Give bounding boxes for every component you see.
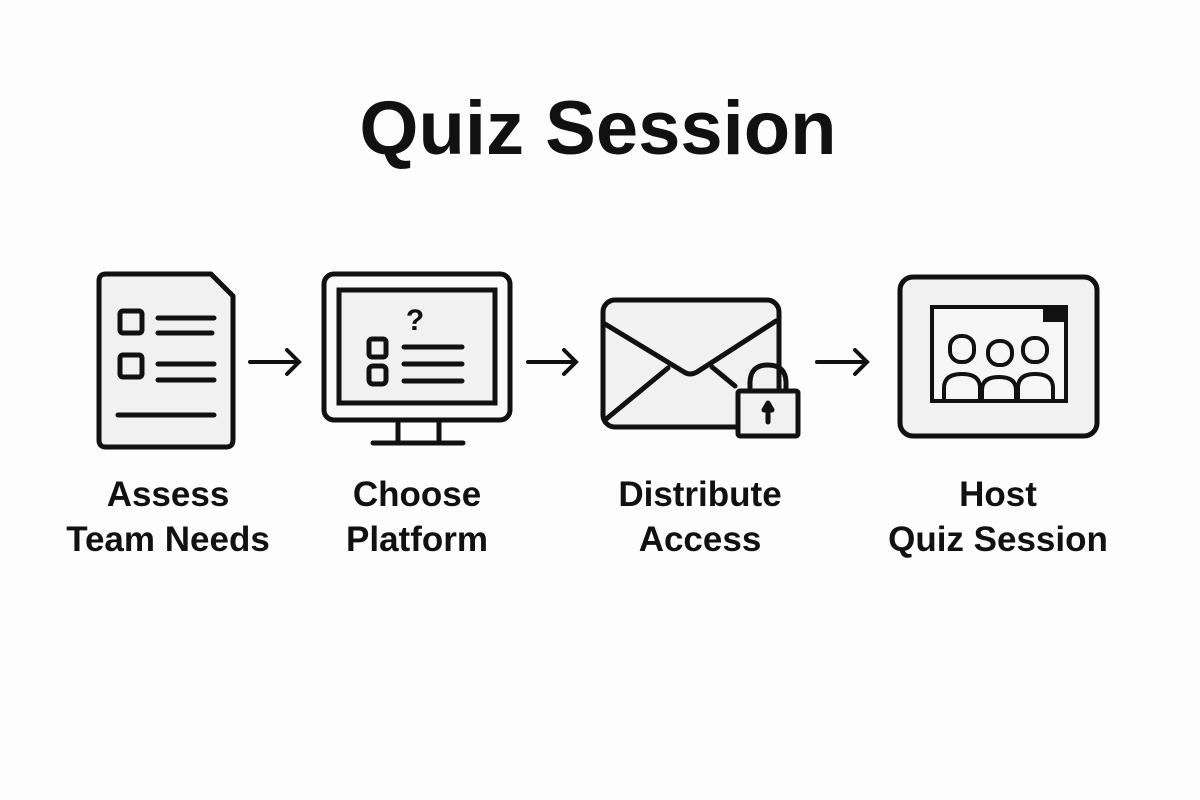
- icon: envelope with lock: [603, 300, 798, 436]
- arrow 1: [250, 350, 299, 374]
- icon: question mark: ?: [406, 304, 424, 337]
- label 1: Assess: [107, 475, 229, 514]
- label 2: Platform: [346, 520, 488, 559]
- label 3: Access: [639, 520, 761, 559]
- label 4: Host: [959, 475, 1037, 514]
- icon: tablet video session: [900, 277, 1097, 436]
- icon: monitor quiz: [324, 274, 510, 443]
- label 2: Choose: [353, 475, 481, 514]
- title: Quiz Session: [359, 86, 837, 171]
- label 1: Team Needs: [66, 520, 270, 559]
- icon: document checklist: [99, 274, 233, 447]
- label 4: Quiz Session: [888, 520, 1108, 559]
- arrow 2: [528, 350, 576, 374]
- label 3: Distribute: [618, 475, 782, 514]
- arrow 3: [817, 350, 867, 374]
